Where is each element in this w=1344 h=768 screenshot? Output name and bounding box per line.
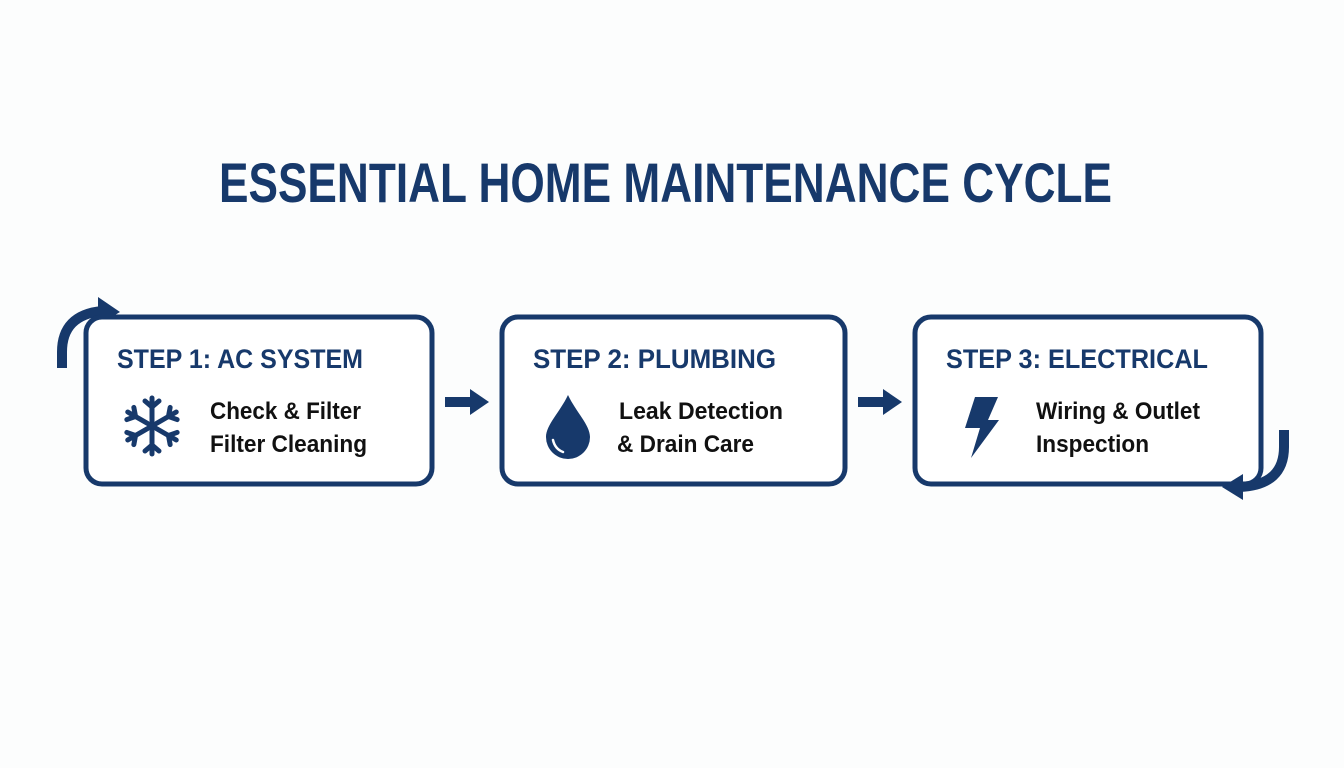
icon: loop arrow start (62, 297, 120, 368)
heading: step 1: STEP 1: AC SYSTEM (117, 344, 363, 374)
arrow 1 to 2 (445, 389, 489, 415)
text: step 3 body: Wiring & Outlet (1036, 398, 1200, 425)
text: step 2 body: & Drain Care (617, 431, 754, 458)
icon: loop arrow end (1222, 430, 1284, 500)
arrow 2 to 3 (858, 389, 902, 415)
text: step 3 body: Inspection (1036, 431, 1149, 458)
panel: step 3 (915, 317, 1261, 484)
icon: lightning bolt (965, 397, 999, 458)
text: step 1 body: Filter Cleaning (210, 431, 367, 458)
heading: step 3: STEP 3: ELECTRICAL (946, 344, 1208, 374)
text: step 2 body: Leak Detection (619, 398, 783, 425)
icon: snowflake (124, 398, 180, 454)
text: step 1 body: Check & Filter (210, 398, 361, 425)
icon: water drop (546, 395, 590, 459)
title: ESSENTIAL HOME MAINTENANCE CYCLE (219, 151, 1112, 214)
heading: step 2: STEP 2: PLUMBING (533, 344, 776, 374)
panel: step 2 (502, 317, 845, 484)
panel: step 1 (86, 317, 432, 484)
